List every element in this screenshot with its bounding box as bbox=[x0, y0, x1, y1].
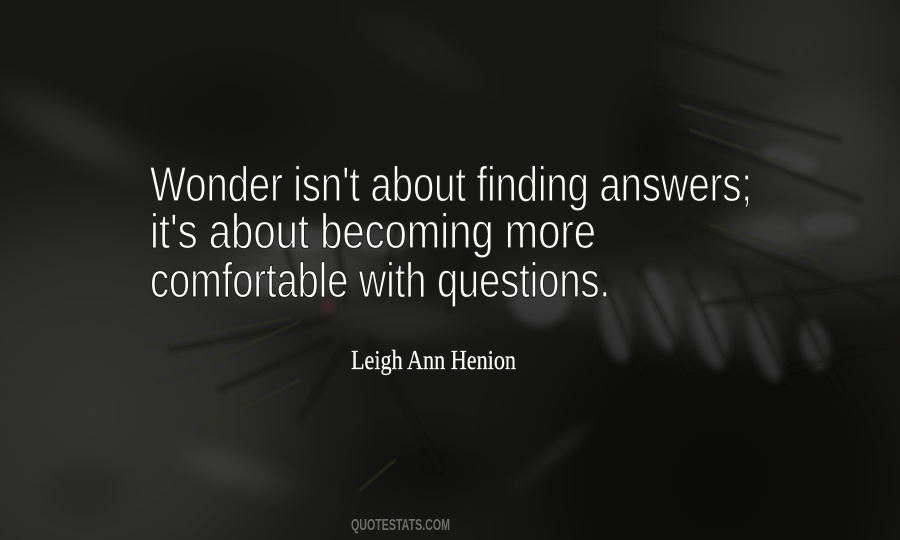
quote text: comfortable with questions. bbox=[150, 254, 610, 308]
snow on pine needles bbox=[236, 142, 858, 385]
quote text bbox=[150, 158, 752, 308]
quote text: it's about becoming more bbox=[150, 205, 596, 259]
olive needle highlights bbox=[150, 105, 820, 490]
dark needles bbox=[170, 35, 900, 470]
author attribution: Leigh Ann Henion bbox=[351, 345, 516, 375]
site credit: QUOTESTATS.COM bbox=[351, 517, 450, 534]
